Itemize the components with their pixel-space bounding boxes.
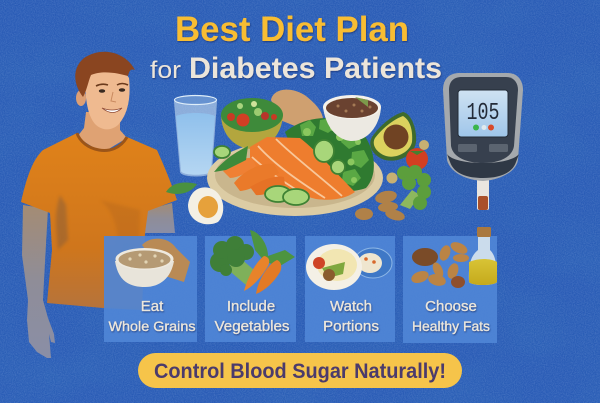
icon: main plate [306, 244, 362, 290]
cucumber slices [214, 140, 345, 205]
heading: best diet plan: Best Diet Plan [175, 10, 409, 49]
label [108, 298, 196, 334]
eyebrows [96, 84, 128, 86]
shirt shading [56, 195, 68, 250]
plate [207, 140, 383, 216]
label [412, 298, 490, 334]
icon: grain bowl [115, 261, 174, 287]
grain bowl [323, 107, 381, 141]
meter buttons [458, 144, 477, 152]
broccoli [397, 165, 431, 210]
hair [75, 52, 135, 97]
glass of water [174, 96, 217, 176]
icon: nuts [410, 240, 469, 288]
panel: eat whole grains [104, 236, 197, 342]
indicator lights [473, 124, 479, 130]
label: Whole Grains [108, 318, 196, 334]
egg [188, 187, 223, 224]
meter screen [458, 90, 508, 137]
food plate [166, 90, 431, 224]
t-shirt [21, 133, 177, 310]
heading: for diabetes patients: for [150, 57, 181, 84]
bread [271, 90, 323, 128]
icon: carrot leaves [250, 230, 295, 266]
leaf garnish [214, 146, 248, 172]
avocado [370, 112, 416, 161]
label: Vegetables [214, 319, 290, 335]
meter strip [477, 176, 489, 210]
nuts [355, 172, 406, 222]
label: Eat [141, 298, 164, 315]
ear [76, 90, 86, 106]
salad bowl [221, 98, 283, 149]
person [21, 52, 177, 358]
leaf [166, 183, 197, 194]
smile [102, 108, 122, 112]
label: Portions [323, 319, 379, 335]
eyes [99, 88, 125, 93]
collar [77, 133, 127, 150]
meter body [443, 73, 523, 181]
nose [111, 92, 116, 102]
panel: include vegetables [205, 230, 296, 342]
neck [77, 112, 127, 153]
icon: carrots [244, 256, 269, 291]
label: Healthy Fats [412, 318, 490, 334]
reading: 105 [466, 100, 500, 127]
label: Choose [425, 298, 477, 315]
head [85, 69, 130, 129]
glucose meter [443, 73, 523, 210]
icon: side plate [354, 248, 392, 278]
panel: choose healthy fats [403, 227, 497, 343]
label: Include [227, 298, 275, 315]
callout: Control Blood Sugar Naturally! [154, 360, 446, 383]
left arm [22, 205, 55, 358]
icon: broccoli [210, 236, 254, 285]
icon: bread [142, 239, 190, 282]
label [214, 298, 290, 335]
greens [285, 118, 374, 191]
label [323, 298, 379, 335]
callout [138, 353, 462, 388]
title [150, 10, 442, 85]
right arm [145, 203, 175, 233]
panel: watch portions [305, 236, 395, 342]
icon: olive oil bottle [469, 236, 497, 285]
small salmon slices [223, 158, 256, 178]
large salmon [250, 137, 355, 200]
heading: for diabetes patients: Diabetes Patients [189, 52, 442, 85]
label: Watch [330, 298, 372, 315]
tomato [406, 148, 428, 170]
